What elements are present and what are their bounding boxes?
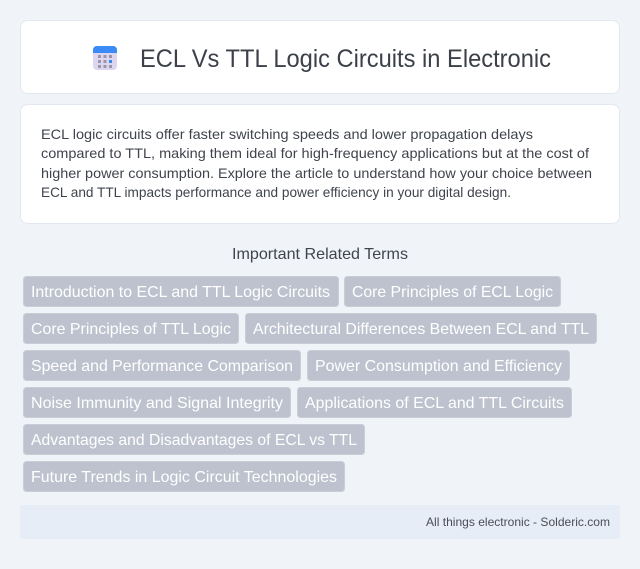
tag: noise: Noise Immunity and Signal Integrity [31,395,283,412]
header panel [20,20,620,94]
intro paragraph: ECL logic circuits offer faster switching speeds and lower propagation delays [41,126,533,142]
tag: introduction [24,276,338,306]
intro paragraph: ECL and TTL impacts performance and power efficiency in your digital design. [41,184,511,200]
tag: future trends: Future Trends in Logic Circuit Technologies [31,469,337,486]
tag: applications [298,388,572,418]
footer text: All things electronic - Solderic.com [426,515,610,529]
intro paragraph [41,126,592,200]
intro paragraph: compared to TTL, making them ideal for high-frequency applications but at the cost of [41,145,589,161]
tag: future trends [24,462,344,492]
footer bar [20,505,620,539]
tag: introduction: Introduction to ECL and TTL Logic Circuits [31,284,330,301]
tag: advantages [24,424,364,454]
tag: power [308,350,570,380]
tag: power: Power Consumption and Efficiency [315,358,562,375]
tag: advantages: Advantages and Disadvantages of ECL vs TTL [31,432,357,449]
tag: ttl principles: Core Principles of TTL Logic [31,321,231,338]
tag: ecl principles: Core Principles of ECL Logic [352,284,553,301]
tag list [24,276,596,492]
tag: architectural differences: Architectural Differences Between ECL and TTL [253,321,589,338]
tag: ecl principles [344,276,560,306]
intro paragraph: higher power consumption. Explore the article to understand how your choice between [41,165,592,181]
icon: calendar [93,46,117,70]
tag: speed [24,350,300,380]
tag: applications: Applications of ECL and TTL Circuits [305,395,564,412]
tag: ttl principles [24,314,238,344]
tag: speed: Speed and Performance Comparison [31,358,293,375]
title: ECL Vs TTL Logic Circuits in Electronic [140,45,551,73]
tag: noise [24,388,290,418]
tag: architectural differences [246,314,596,344]
intro text panel [20,104,620,224]
heading: important related terms: Important Related Terms [232,246,408,263]
